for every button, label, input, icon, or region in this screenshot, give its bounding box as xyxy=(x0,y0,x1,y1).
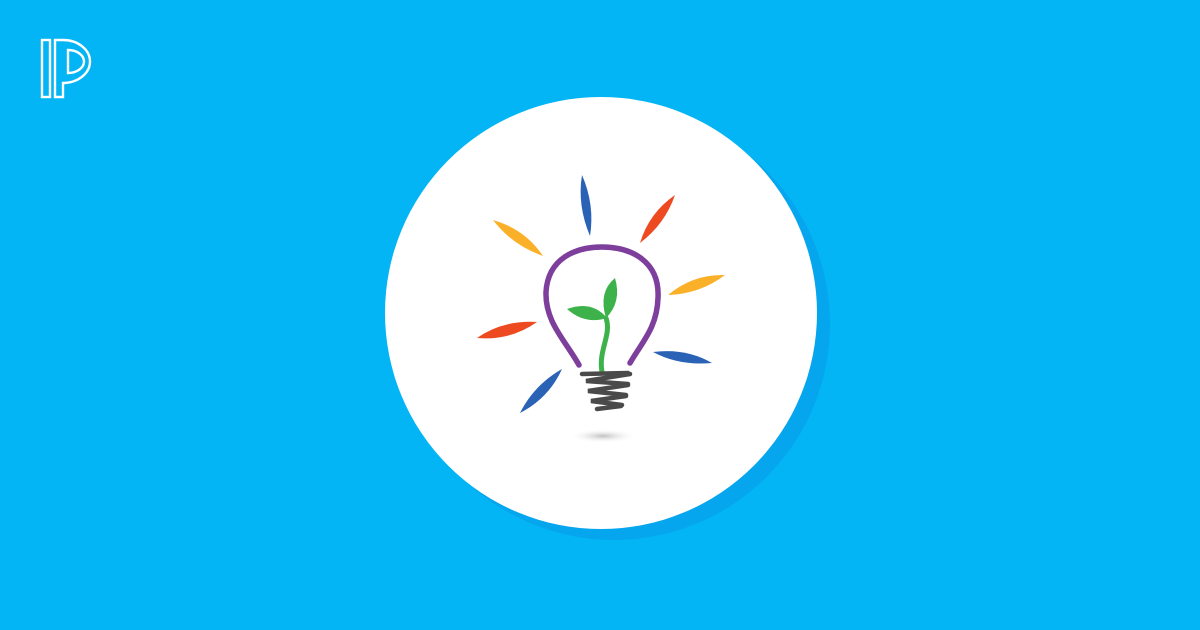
bulb base spring xyxy=(582,373,630,409)
bulb shadow xyxy=(569,429,637,443)
rays xyxy=(477,175,725,413)
circle shadow xyxy=(398,108,830,540)
seedling xyxy=(567,278,617,372)
white circle xyxy=(385,97,817,529)
logo xyxy=(42,40,90,97)
bulb outline xyxy=(546,247,658,365)
